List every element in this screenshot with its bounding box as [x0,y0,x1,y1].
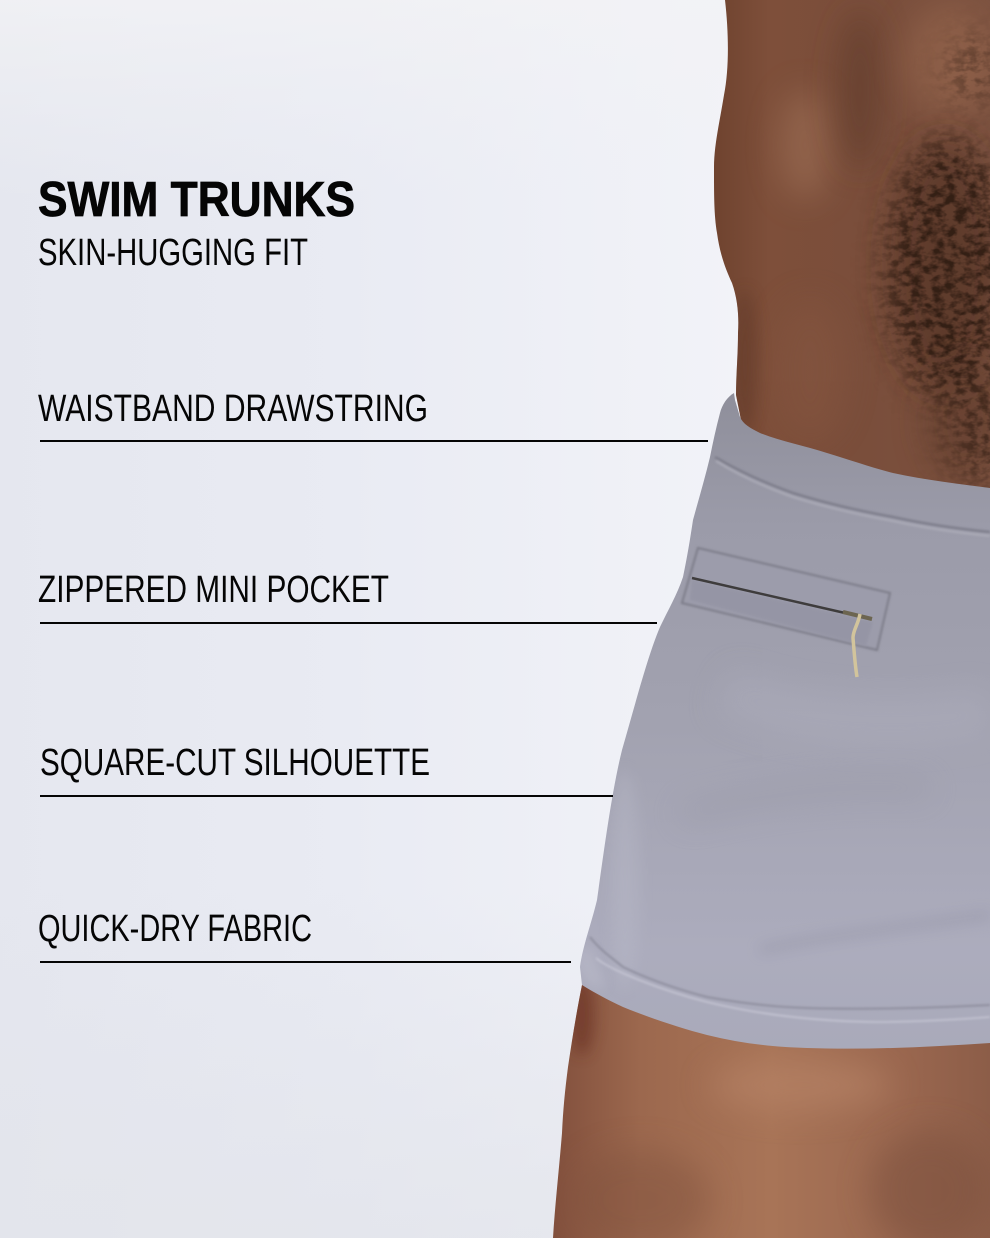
subtitle: SKIN-HUGGING FIT [38,232,308,274]
feature: waistband drawstring: WAISTBAND DRAWSTRING [38,388,428,430]
torso shading [779,90,831,200]
fabric shading [725,690,990,720]
waistband seam [715,457,990,532]
leg [540,970,990,1238]
zipper [692,578,845,613]
hem seams [590,937,990,1009]
zipper pull [853,614,860,677]
chest hair [870,26,990,488]
leg shading [570,975,594,1055]
feature: square-cut silhouette: SQUARE-CUT SILHOUETTE [40,742,430,784]
feature: quick-dry fabric: QUICK-DRY FABRIC [38,908,312,950]
swim trunks [570,385,990,1055]
title: SWIM TRUNKS [38,173,355,227]
feature: zippered mini pocket: ZIPPERED MINI POCKET [38,569,389,611]
pocket [682,548,890,677]
torso [700,0,990,500]
